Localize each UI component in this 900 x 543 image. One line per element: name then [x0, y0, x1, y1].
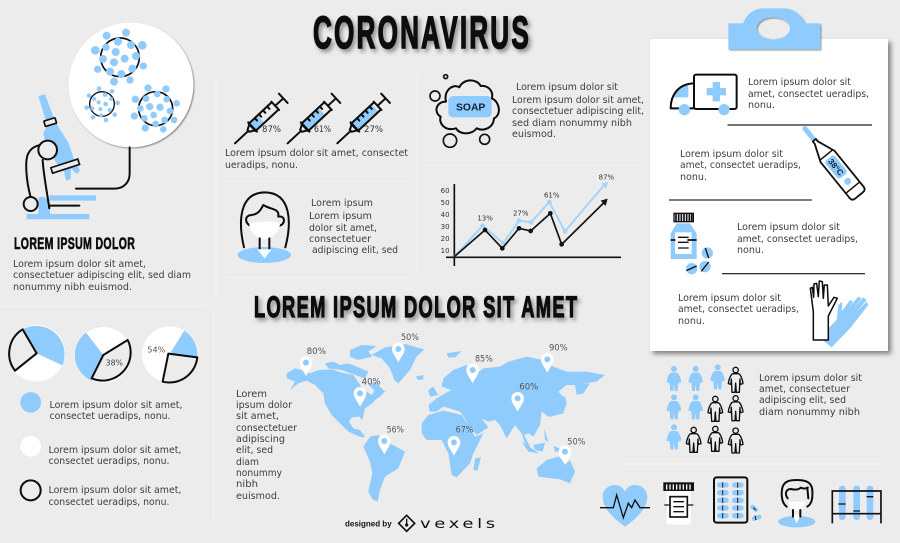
legend swatches [20, 392, 41, 500]
line chart: 60 [441, 187, 450, 195]
icon: woman with mask [238, 192, 291, 263]
map percentages: 50% [401, 333, 419, 343]
vexels credit: designed by [345, 519, 392, 529]
map percentages: 67% [456, 426, 473, 436]
icon: magnified virus circle [69, 23, 193, 147]
icon: test tubes [832, 486, 881, 523]
legend text: Lorem ipsum dolor sit amet, [50, 400, 182, 411]
syringe percentages: 87% [262, 124, 281, 135]
legend text: Lorem ipsum dolor sit amet, [48, 485, 182, 496]
bottom icon row [600, 477, 881, 527]
text block: soap description: euismod. [512, 129, 556, 140]
icon: syringe 61% [283, 94, 340, 148]
clipboard clip [728, 8, 820, 49]
legend text [48, 400, 182, 508]
map percentages: 85% [475, 354, 493, 364]
text: thermometer: nonu. [680, 172, 707, 183]
text: medicine [737, 222, 858, 256]
text block: soap description [512, 82, 644, 140]
text block: mask description: dolor sit amet, [309, 223, 377, 234]
text block: syringes description: ueradips, nonu. [225, 160, 298, 171]
line chart: 10 [441, 247, 450, 255]
americas and greenland [287, 344, 424, 502]
legend text: consectet ueradips, nonu. [48, 497, 170, 508]
text block: map description: sit amet, [236, 411, 279, 422]
vexels credit: vexels [420, 515, 495, 531]
legend text: consectet ueradips, nonu. [50, 411, 170, 422]
text: medicine: Lorem ipsum dolor sit [737, 222, 840, 233]
pie chart 1 [8, 325, 65, 382]
text block: soap description: Lorem ipsum dolor sit [516, 82, 618, 93]
map percentages: 80% [307, 347, 326, 357]
text block: mask description: Lorem ipsum [309, 211, 372, 222]
text: gloves [678, 293, 799, 327]
text block: syringes description: Lorem ipsum dolor sit amet, consectet [225, 148, 408, 159]
map pins [300, 343, 571, 465]
map percentages: 60% [519, 382, 538, 392]
text block: map description: Lorem [236, 389, 267, 400]
text block: map description: euismod. [236, 491, 280, 502]
line chart: 27% [513, 210, 529, 218]
pie chart 3 [142, 326, 198, 383]
syringe percentages [262, 124, 383, 135]
text block: soap description: sed diam nonummy nibh [512, 118, 632, 129]
text: thermometer: Lorem ipsum dolor sit [680, 149, 783, 160]
icon: thermometer: 38°C [826, 157, 845, 178]
legend text: consectet ueradips, nonu. [48, 456, 170, 467]
eurasia africa australia [422, 351, 605, 483]
line chart: 30 [441, 223, 450, 231]
text block: soap description: Lorem ipsum dolor sit amet, [512, 95, 644, 106]
map percentages: 90% [549, 344, 568, 354]
syringe percentages: 27% [364, 124, 383, 135]
text block: mask description: consectetuer [309, 234, 372, 245]
text block: map description: elit, sed [236, 445, 273, 456]
text: gloves: nonu. [678, 316, 705, 327]
heading: lorem ipsum dolor: LOREM IPSUM DOLOR [14, 233, 135, 253]
black series [454, 199, 608, 257]
text block: map description: nonummy [236, 468, 282, 479]
line chart: 61% [544, 192, 560, 200]
text block: microscope description [13, 259, 191, 293]
text block: people description: Lorem ipsum dolor sit [759, 373, 862, 384]
map percentages: 56% [387, 425, 404, 435]
icon: soap [430, 75, 499, 147]
text block: microscope description: Lorem ipsum dolor sit amet, [13, 259, 146, 270]
line chart: 50 [441, 199, 450, 207]
world map [287, 333, 605, 502]
heading: lorem ipsum dolor sit amet: LOREM IPSUM DOLOR SIT AMET [254, 292, 577, 324]
pie chart 2: 38% [106, 357, 123, 367]
line chart: 87% [599, 173, 615, 181]
map percentages: 50% [567, 437, 585, 447]
text block: people description [759, 373, 862, 418]
text block: map description: nibh [236, 479, 258, 490]
clipboard paper [650, 39, 888, 351]
text block: microscope description: consectetuer adipiscing elit, sed diam [13, 270, 191, 281]
map percentages: 40% [362, 377, 381, 387]
icon: ambulance [671, 75, 737, 115]
icon: medicine bottle and pills [671, 213, 713, 274]
text block: mask description: adipiscing elit, sed [312, 245, 398, 256]
syringe percentages: 61% [314, 124, 331, 135]
text block: map description: consectetuer [236, 423, 298, 434]
panel: microscope with magnified virus [24, 23, 193, 219]
map percentages [307, 333, 585, 447]
text: ambulance: nonu. [748, 100, 775, 111]
blue series [454, 182, 608, 257]
text block: syringes description [225, 148, 408, 171]
text block: map description: ipsum dolor [236, 400, 293, 411]
text: ambulance: amet, consectet ueradips, [748, 89, 869, 100]
text block: people description: diam nonummy nibh [759, 407, 860, 418]
panel: pie charts [8, 325, 198, 500]
text: medicine: amet, consectet ueradips, [737, 234, 858, 245]
icon: gloves [810, 281, 868, 347]
text block: mask description [309, 198, 398, 256]
text block: map description [236, 389, 298, 502]
icon: doctor with mask [778, 480, 815, 527]
icon: soap: SOAP [456, 102, 485, 113]
pie chart 3: 54% [147, 344, 165, 354]
text: thermometer [680, 149, 801, 183]
text block: microscope description: nonummy nibh euismod. [13, 282, 132, 293]
legend text: Lorem ipsum dolor sit amet, [48, 445, 182, 456]
icon: syringe 27% [333, 94, 390, 148]
line chart [441, 173, 621, 266]
text: ambulance [748, 77, 869, 111]
title: CORONAVIRUS [313, 8, 529, 58]
icon: syringe 87% [231, 94, 288, 148]
text block: soap description: consectetuer adipiscing elit, [512, 106, 644, 117]
line chart: 40 [441, 211, 450, 219]
vexels credit [345, 515, 495, 531]
line chart: 13% [477, 214, 493, 222]
panel: clipboard [650, 8, 888, 351]
text: medicine: nonu. [737, 245, 764, 256]
text: gloves: Lorem ipsum dolor sit [678, 293, 781, 304]
icon: microscope [24, 94, 130, 219]
text block: people description: amet, consectetuer [759, 384, 851, 395]
text: thermometer: amet, consectet ueradips, [680, 160, 801, 171]
icon: blister pack [714, 477, 762, 523]
icon: thermometer [798, 123, 866, 201]
text block: map description: adipiscing [236, 434, 285, 445]
icon: heart with pulse [600, 485, 650, 527]
text: ambulance: Lorem ipsum dolor sit [748, 77, 851, 88]
panel: syringes [231, 94, 390, 148]
line chart: 20 [441, 235, 450, 243]
text block: mask description: Lorem ipsum [311, 198, 373, 209]
text block: map description: diam [236, 457, 259, 468]
text block: people description: adipiscing elit, sed [759, 395, 846, 406]
text: gloves: amet, consectet ueradips, [678, 304, 799, 315]
pie chart 2 [75, 327, 131, 383]
people pictogram [667, 364, 743, 453]
icon: test report [663, 482, 694, 524]
